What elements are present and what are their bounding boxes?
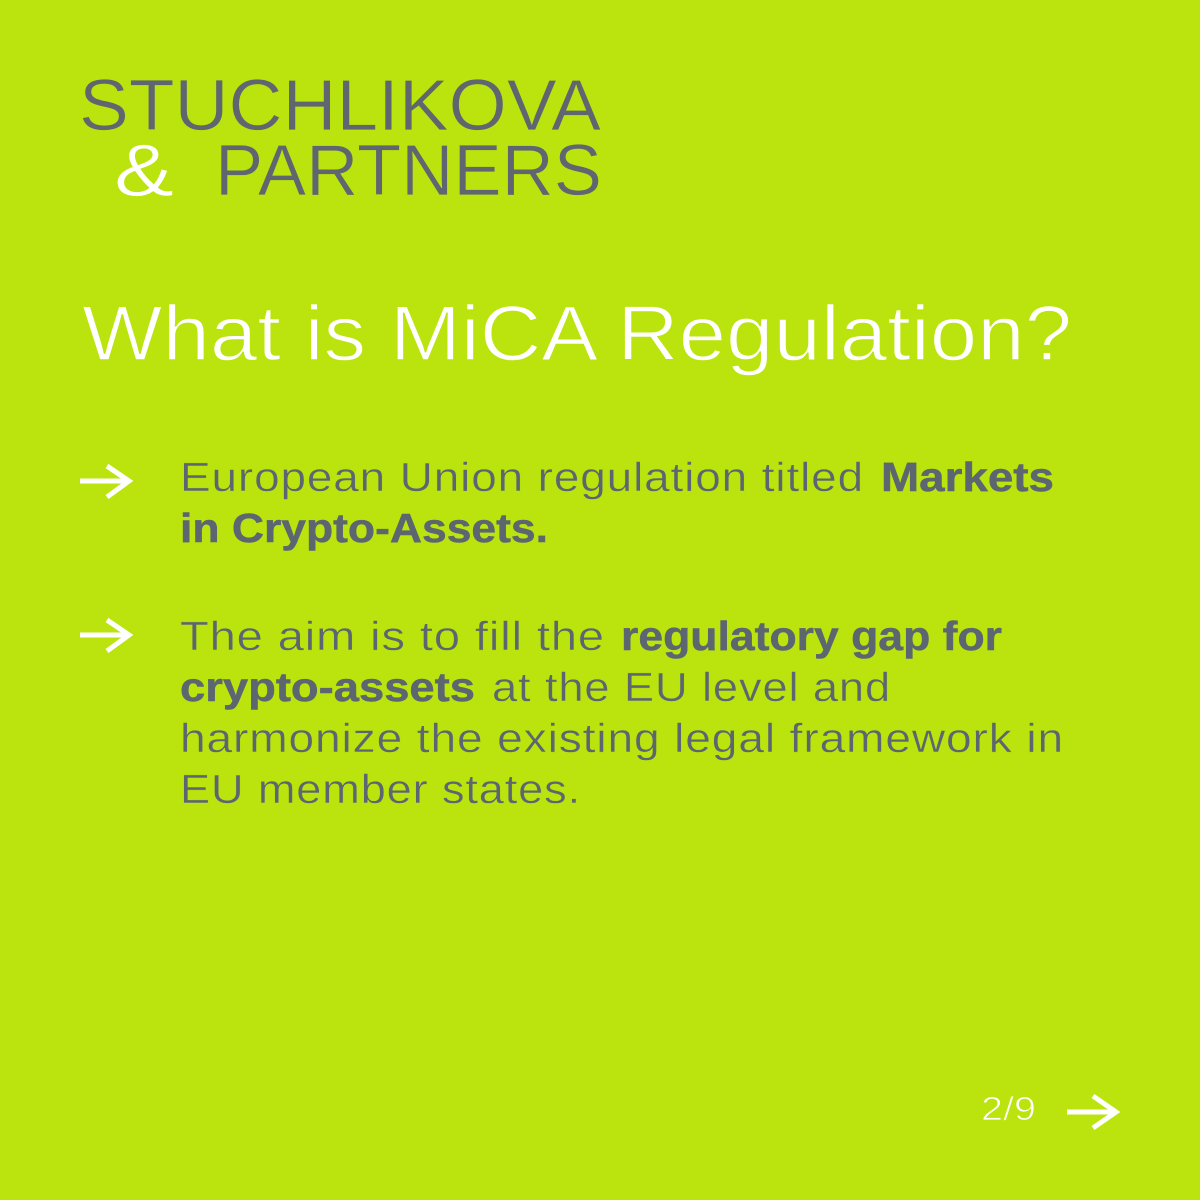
text block: bullet 2: harmonize the existing legal framework in [180, 715, 1064, 761]
logo: Stuchlikova & Partners: STUCHLIKOVA [79, 66, 601, 146]
text block: bullet 1: European Union regulation titled [180, 454, 864, 500]
text block: bullet 1: in Crypto-Assets. [180, 505, 548, 551]
text block: bullet 2 [180, 613, 1064, 812]
icon: bullet arrow 1 [80, 466, 130, 497]
icon: bullet arrow 2 [80, 620, 130, 651]
text block: bullet 2: EU member states. [180, 766, 581, 812]
icon: next page arrow [1067, 1096, 1117, 1128]
text block: bullet 2: The aim is to fill the [180, 613, 605, 659]
logo: Stuchlikova & Partners: PARTNERS [215, 131, 602, 211]
text block: bullet 2: crypto-assets [180, 664, 475, 710]
text block: bullet 1 [180, 454, 1054, 551]
text block: bullet 2: at the EU level and [492, 664, 891, 710]
logo: Stuchlikova & Partners [79, 66, 602, 212]
text block: bullet 2: regulatory gap for [621, 613, 1002, 659]
text block: bullet 1: Markets [881, 454, 1054, 500]
page number: 2/9 [981, 1090, 1036, 1127]
logo: Stuchlikova & Partners: & [114, 129, 174, 212]
title: What is MiCA Regulation? [82, 289, 1072, 377]
